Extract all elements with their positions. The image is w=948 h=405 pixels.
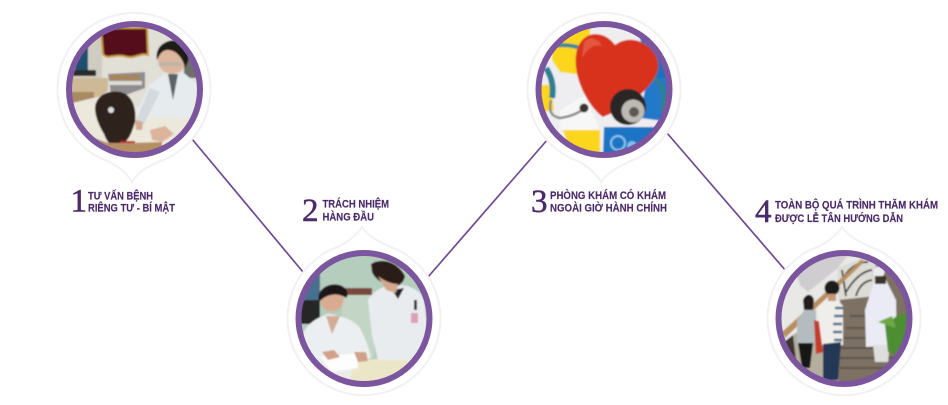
caption 2: TRÁCH NHIỆM — [322, 198, 389, 210]
step 2 — [288, 193, 441, 395]
caption 4 — [775, 198, 938, 225]
photo: red heart with stethoscope — [542, 27, 666, 152]
step 1 — [58, 13, 211, 219]
caption 1: RIÊNG TƯ - BÍ MẬT — [88, 202, 175, 214]
ring 2 — [298, 253, 430, 384]
connector line 2 to 3 — [428, 139, 548, 277]
number 3: 3 — [531, 184, 548, 220]
number 1: 1 — [70, 184, 87, 220]
caption 1 — [88, 190, 175, 214]
connector line 3 to 4 — [667, 133, 786, 271]
halo pin 2 — [288, 227, 441, 395]
photo: receptionist guiding patients on stairs — [782, 256, 906, 381]
ring 4 — [778, 253, 910, 384]
caption 4: ĐƯỢC LỄ TÂN HƯỚNG DẪN — [775, 212, 903, 225]
photo: two doctors at desk — [302, 256, 426, 381]
caption 2 — [322, 198, 389, 224]
number 2: 2 — [302, 193, 318, 229]
step 3 — [528, 13, 681, 220]
step 4 — [755, 194, 938, 395]
caption 3 — [550, 189, 667, 214]
caption 1: TƯ VẤN BỆNH — [88, 190, 153, 202]
caption 3: PHÒNG KHÁM CÓ KHÁM — [550, 189, 666, 202]
connector line 1 to 2 — [192, 139, 303, 272]
halo pin 4 — [767, 227, 920, 395]
halo pin 3 — [528, 13, 681, 182]
caption 2: HÀNG ĐẦU — [322, 210, 374, 224]
caption 3: NGOÀI GIỜ HÀNH CHÍNH — [550, 202, 667, 214]
ring 1 — [69, 24, 200, 155]
halo pin 1 — [58, 13, 211, 182]
ring 3 — [538, 24, 670, 155]
photo: doctor consulting patient — [72, 27, 197, 152]
number 4: 4 — [755, 194, 772, 230]
